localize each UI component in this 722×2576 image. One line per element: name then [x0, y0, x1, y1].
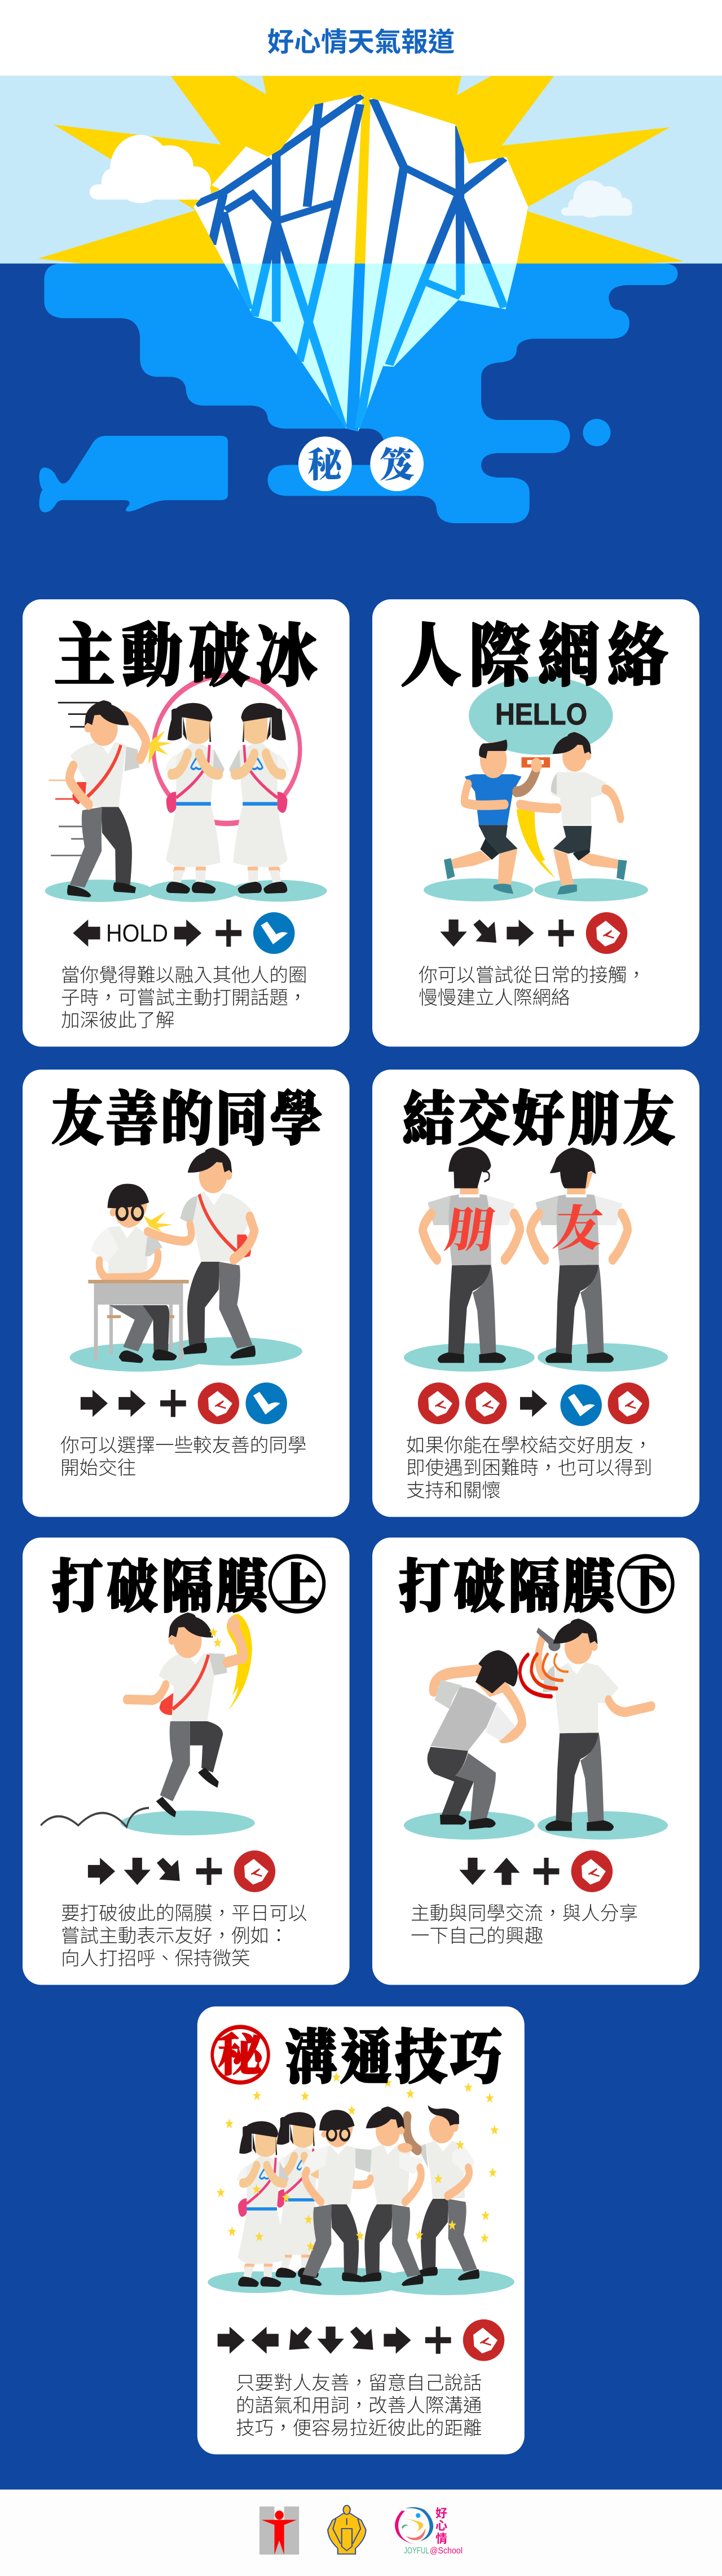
sun rays: [38, 76, 684, 263]
sound waves: [520, 1654, 568, 1696]
iceberg lines below water: [232, 264, 507, 428]
panel: 友善的同學: [23, 1070, 350, 1517]
text block: 只要對人友善，留意自己說話: [236, 2372, 482, 2394]
figure: jumping boy: [126, 1612, 244, 1817]
title: 結交好朋友: [403, 1072, 675, 1156]
text block: 如果你能在學校結交好朋友，: [406, 1435, 653, 1456]
figure: seated boy: [91, 1184, 177, 1363]
icon row: [440, 912, 627, 954]
icon row: [459, 1850, 613, 1892]
water spot: [583, 419, 610, 446]
text block: 即使遇到困難時，也可以得到: [406, 1458, 653, 1479]
figure: back view friend 2: 友: [550, 1190, 608, 1260]
badge: 笈: [370, 436, 424, 491]
text block: 向人打招呼、保持微笑: [61, 1948, 250, 1969]
desk: [88, 1280, 189, 1360]
card background: [23, 599, 350, 1046]
text block: [236, 2372, 482, 2439]
panel: 人際網絡: [372, 599, 699, 1046]
logo: Joyful at School: @School: [430, 2546, 463, 2556]
icon row: [218, 2319, 504, 2361]
ground: [208, 2268, 514, 2295]
figure: running boy: [67, 700, 146, 898]
text block: [411, 1903, 638, 1947]
text block: 慢慢建立人際網絡: [419, 987, 570, 1009]
badge: 秘: 秘: [307, 437, 346, 487]
text block: 嘗試主動表示友好，例如：: [61, 1925, 288, 1947]
badge: 秘: [298, 436, 352, 491]
card background: [23, 1537, 350, 1985]
hello: HELLO: [495, 697, 587, 731]
ground: [404, 1811, 668, 1840]
hero: iceberg scene: [0, 0, 722, 564]
title: 人際網絡: [400, 601, 668, 699]
yellow swoosh: [227, 1614, 252, 1711]
figure: back view friend 1: [422, 1147, 520, 1363]
logo: Joyful at School: 情: [435, 2530, 447, 2547]
logo: Joyful at School: 心: [435, 2517, 447, 2534]
figure: girl left: [165, 703, 224, 894]
iceberg above water: [193, 94, 528, 263]
header band: [0, 0, 722, 76]
ground: [120, 1810, 255, 1835]
title: 主動破冰: [54, 601, 317, 699]
yellow swoosh: [517, 809, 556, 878]
icon row: [73, 912, 294, 954]
speech bubble: [469, 677, 613, 755]
title: 打破隔膜: [399, 1541, 617, 1623]
text block: 開始交往: [60, 1457, 136, 1479]
sea: [0, 263, 722, 564]
title: 友善的同學: [51, 1072, 322, 1156]
text block: [419, 965, 646, 1009]
figure: boy with megaphone: [536, 1619, 651, 1831]
icon row: [81, 1382, 287, 1424]
text block: 的語氣和用詞，改善人際溝通: [236, 2395, 482, 2416]
ground: [70, 1337, 302, 1372]
stars: [217, 2072, 499, 2251]
icon row: [88, 1850, 275, 1892]
icon row: HOLD: [106, 920, 168, 947]
text block: 子時，可嘗試主動打開話題，: [61, 987, 307, 1009]
sky: [0, 76, 722, 263]
text block: 一下自己的興趣: [411, 1925, 543, 1947]
logo: hands and figure: [328, 2506, 366, 2554]
footer band: [0, 2490, 722, 2576]
figure: crouching student: [428, 1650, 522, 1830]
text block: 要打破彼此的隔膜，平日可以: [61, 1903, 307, 1924]
logo: Joyful at School: 好: [435, 2504, 447, 2521]
motion lines: [49, 702, 99, 855]
logo: Joyful at School: JOYFUL: [404, 2546, 429, 2556]
cloud: small: [561, 180, 632, 218]
card background: [372, 1070, 699, 1517]
desk back: [109, 1305, 173, 1354]
panel: 溝通技巧: [197, 2007, 525, 2454]
pink circle: [153, 675, 300, 824]
text block: [61, 1903, 307, 1969]
figure: man in white: [520, 732, 627, 894]
figure: middle boy: [353, 2106, 424, 2286]
figure: man in blue: [444, 740, 550, 894]
title: 好心情天氣報道: [267, 28, 455, 58]
cloud: large: [90, 135, 211, 203]
iceberg below water: [224, 263, 517, 431]
hit spark: [148, 731, 172, 765]
logo: Education Bureau style: [259, 2507, 299, 2555]
figure: girl back: [274, 2112, 326, 2278]
title: 溝通技巧: [285, 2011, 502, 2095]
ground: [404, 1343, 668, 1372]
jump trail: [41, 1808, 149, 1827]
iceberg centre crack: [346, 94, 371, 431]
text block: [60, 1435, 307, 1479]
card background: [372, 1537, 699, 1985]
text block: 支持和關懷: [406, 1481, 501, 1501]
logo: Joyful at School: [395, 2504, 463, 2556]
text block: 主動與同學交流，與人分享: [411, 1903, 638, 1924]
text block: 加深彼此了解: [61, 1010, 174, 1031]
ground: [45, 880, 327, 902]
text block: 你可以嘗試從日常的接觸，: [419, 965, 646, 986]
raised arm: [407, 2117, 417, 2150]
figure: standing boy: [147, 1147, 256, 1359]
title mark: 下: 下: [623, 1549, 671, 1614]
text block: 你可以選擇一些較友善的同學: [60, 1435, 307, 1456]
title mark: 上: 上: [274, 1549, 319, 1614]
icon row: [418, 1382, 649, 1426]
footer: [0, 2490, 722, 2576]
figure: girl front: [237, 2121, 289, 2287]
text block: 當你覺得難以融入其他人的圈: [61, 965, 307, 986]
text block: [406, 1435, 653, 1501]
whale: [39, 436, 228, 512]
card background: [23, 1070, 350, 1517]
ground: [424, 878, 648, 902]
title mark: 秘: 秘: [218, 2019, 267, 2084]
hand on shoulder: [398, 2143, 412, 2153]
panel: 結交好朋友: [372, 1070, 699, 1517]
figure: left boy: [300, 2110, 372, 2286]
text block: 技巧，便容易拉近彼此的距離: [236, 2418, 482, 2439]
figure: right boy: [417, 2105, 479, 2281]
hit spark: [143, 1212, 173, 1232]
figure: girl right: [229, 703, 289, 894]
card background: [372, 599, 699, 1046]
light water shape: [44, 263, 678, 523]
panel: 打破隔膜下: [372, 1537, 699, 1985]
card background: [197, 2007, 525, 2454]
figure: back view friend 2: [530, 1147, 628, 1363]
text block: [61, 965, 307, 1031]
panel: 主動破冰: [23, 599, 350, 1046]
title: 打破隔膜: [52, 1541, 270, 1623]
figure: back view friend 1: 朋: [442, 1191, 500, 1261]
panel: 打破隔膜上: [23, 1537, 350, 1985]
badge: 笈: 笈: [380, 437, 415, 487]
iceberg lines above water: [195, 95, 508, 264]
